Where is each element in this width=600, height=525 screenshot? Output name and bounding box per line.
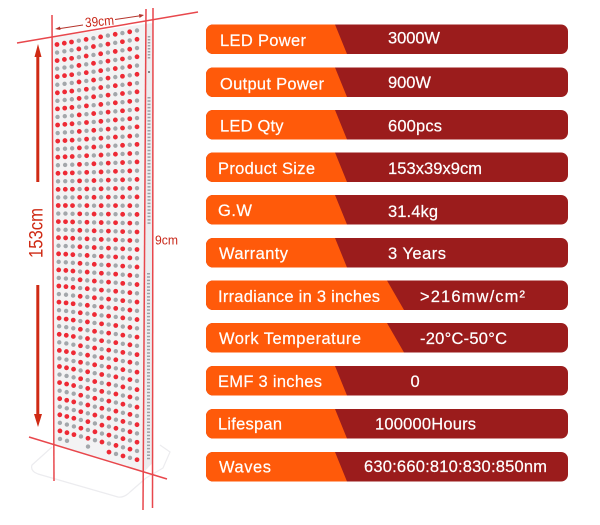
spec row: Output Power bbox=[206, 68, 568, 97]
spec row: Irradiance: Irradiance in 3 inches bbox=[218, 288, 380, 306]
spec row: LED Qty: LED Qty bbox=[220, 118, 284, 136]
spec row: LED Qty bbox=[206, 110, 568, 140]
spec row: G.W: 31.4kg bbox=[388, 203, 438, 221]
spec row: Lifespan: Lifespan bbox=[218, 416, 282, 434]
spec row: Warranty: Warranty bbox=[219, 245, 289, 263]
spec row: Output Power: Output Power bbox=[220, 76, 324, 94]
spec row: EMF 3 inches: EMF 3 inches bbox=[218, 373, 322, 391]
height dimension: 153cm: 153cm bbox=[26, 208, 48, 258]
side perforations bbox=[148, 36, 150, 460]
spec row: Work Temperature: -20°C-50°C bbox=[420, 330, 507, 348]
spec row: LED Power: LED Power bbox=[220, 32, 306, 50]
panel side face bbox=[144, 23, 153, 472]
panel front face bbox=[53, 24, 145, 472]
spec row: LED Power bbox=[206, 24, 568, 54]
spec row: LED Power: 3000W bbox=[388, 30, 440, 48]
spec row: EMF 3 inches: 0 bbox=[410, 373, 420, 391]
spec row: G.W: G.W bbox=[218, 202, 252, 220]
spec row: Warranty: 3 Years bbox=[388, 245, 446, 263]
spec row: Lifespan bbox=[206, 409, 568, 438]
spec row: Warranty bbox=[206, 238, 568, 268]
stand base outline bbox=[32, 445, 170, 497]
product illustration: LED panel bbox=[32, 23, 170, 497]
spec row: Waves: Waves bbox=[219, 458, 271, 476]
spec row: Product Size: Product Size bbox=[218, 160, 315, 178]
width dimension: 39cm: 39cm bbox=[84, 13, 115, 30]
spec row: EMF 3 inches bbox=[206, 366, 568, 396]
depth dimension: 9cm: 9cm bbox=[155, 234, 178, 248]
dimension lines bbox=[17, 8, 198, 510]
width dimension: 39cm bbox=[55, 13, 144, 30]
spec row: Product Size bbox=[206, 152, 568, 182]
spec row: Irradiance bbox=[206, 280, 568, 310]
spec row: LED Qty: 600pcs bbox=[388, 118, 442, 136]
spec row: Work Temperature: Work Temperature bbox=[219, 330, 361, 348]
spec row: Waves: 630:660:810:830:850nm bbox=[364, 458, 547, 476]
spec row: Waves bbox=[206, 452, 568, 482]
LED grid bbox=[57, 30, 137, 460]
spec row: G.W bbox=[206, 195, 568, 224]
spec row: Work Temperature bbox=[206, 323, 568, 352]
spec row: Output Power: 900W bbox=[388, 74, 431, 92]
spec row: Irradiance: >216mw/cm² bbox=[420, 288, 526, 306]
spec row: Product Size: 153x39x9cm bbox=[388, 160, 482, 178]
spec row: Lifespan: 100000Hours bbox=[375, 416, 476, 434]
height dimension: 153cm bbox=[26, 44, 48, 427]
